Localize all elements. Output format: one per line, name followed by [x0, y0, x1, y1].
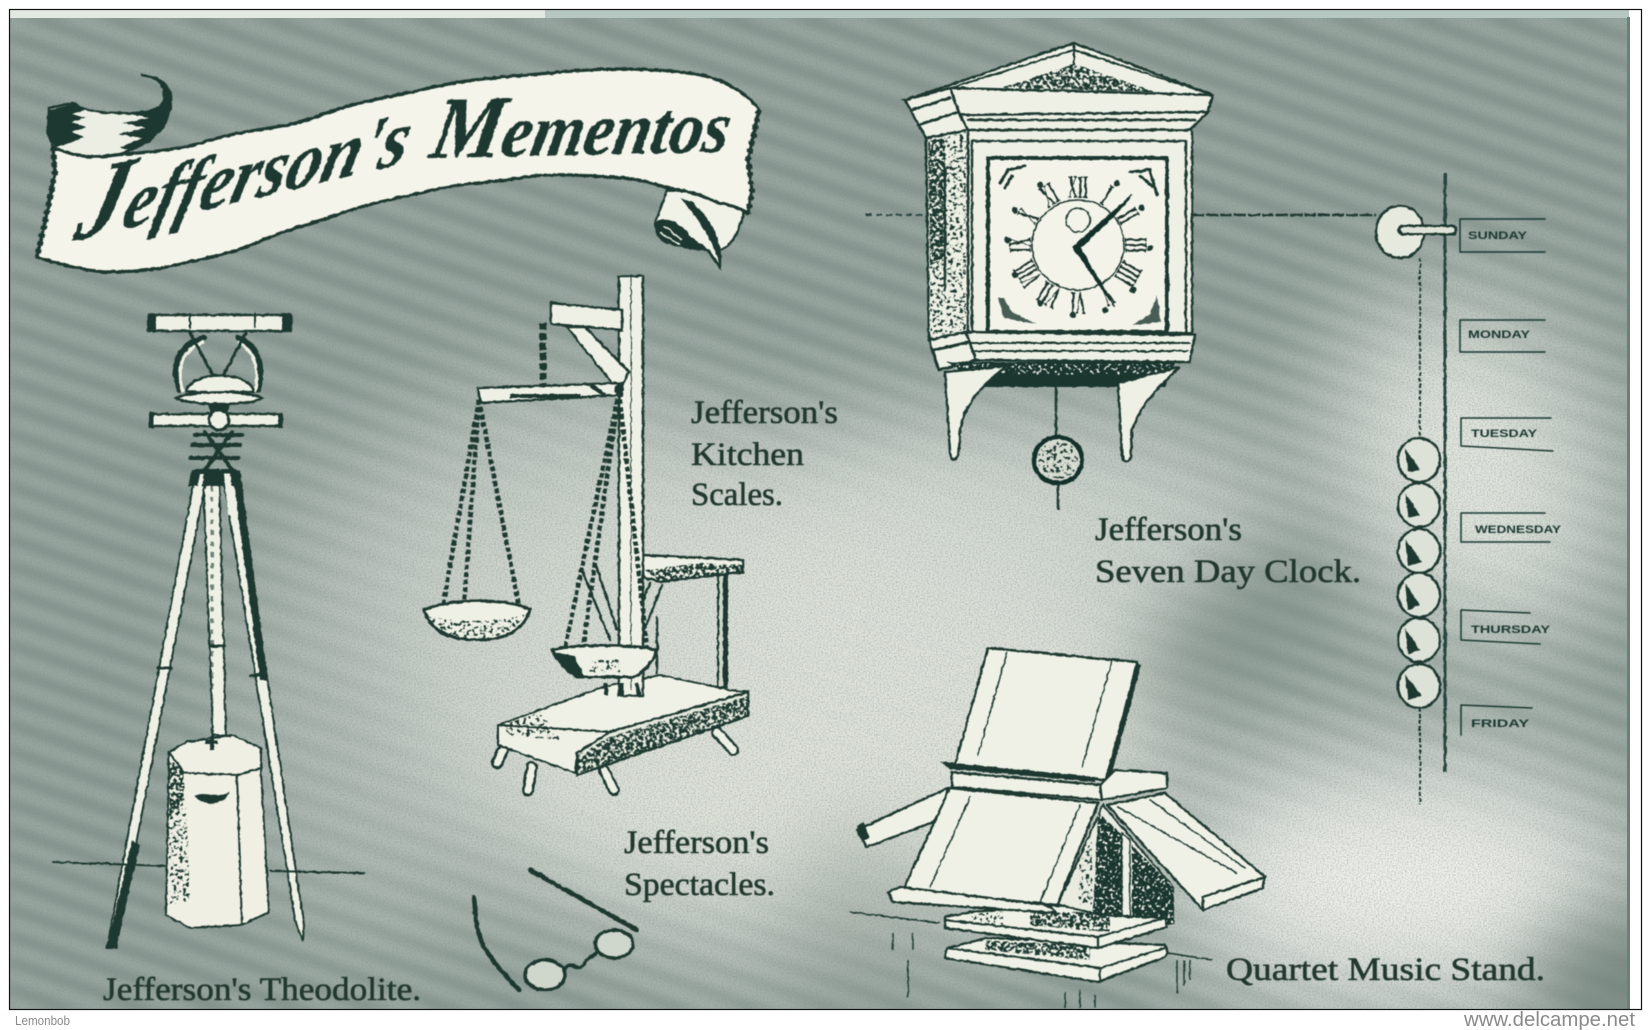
scale post and arm: [551, 276, 643, 697]
caption: clock: Seven Day Clock.: [1095, 554, 1361, 590]
roman numerals: IX: [1004, 237, 1039, 253]
base top: [498, 675, 748, 732]
lower base plate: [945, 938, 1168, 982]
base front: [498, 725, 610, 773]
Sunday: [1460, 219, 1545, 252]
right lens: [595, 930, 633, 958]
roman numerals: I: [1095, 179, 1118, 212]
left bracket: [945, 366, 1006, 460]
Monday: [1460, 320, 1545, 352]
watermark: seller name: Lemonbob: [15, 1013, 70, 1028]
bridge: [565, 952, 597, 968]
kitchen scales: [424, 276, 748, 790]
banner right tail hatching: [655, 198, 721, 267]
right bracket: [1118, 367, 1180, 462]
upper music panel: [940, 648, 1141, 782]
caption: music stand: Quartet Music Stand.: [1226, 952, 1545, 988]
banner ribbon: [37, 69, 759, 272]
shelf struts: [632, 583, 662, 673]
lower moulding: [929, 332, 1195, 370]
minute dots: [1004, 180, 1153, 318]
Sunday: SUNDAY: [1468, 230, 1528, 242]
quartet music stand: [850, 648, 1265, 1008]
Monday: MONDAY: [1468, 329, 1531, 341]
roman numerals: VIII: [1007, 255, 1050, 292]
lower front music panel: [888, 788, 1098, 913]
caption: clock: [1095, 512, 1361, 590]
spectacles: [474, 870, 637, 990]
banner serrated edges: [37, 110, 759, 257]
roman numerals: II: [1109, 203, 1145, 230]
right pan with chains: [552, 392, 657, 677]
scale base and shelf: [497, 555, 748, 790]
pulley: [1376, 206, 1424, 258]
caption: kitchen scales: Jefferson's: [691, 395, 838, 431]
telescope: [147, 313, 291, 331]
hanging rope: [1419, 258, 1421, 805]
clock side: [926, 130, 968, 340]
legs: [497, 732, 733, 790]
corner ornaments: [998, 166, 1161, 325]
left pan with chains: [424, 400, 530, 640]
title word: Jefferson's: Jefferson's: [65, 67, 428, 266]
Tuesday: [1461, 418, 1553, 451]
tripod head: [188, 432, 242, 515]
caption: kitchen scales: Scales.: [691, 477, 783, 513]
vertical circle frame: [176, 333, 262, 420]
caption: kitchen scales: [691, 395, 838, 513]
Friday: [1461, 705, 1532, 735]
numeral ring: [1032, 200, 1124, 290]
temple arms: [474, 870, 637, 990]
seconds circle: [1066, 208, 1090, 232]
rope from clock to pulley: [1192, 214, 1376, 216]
tripod legs: [107, 470, 304, 948]
title: [65, 67, 741, 266]
instrument case: [166, 735, 269, 928]
caption: spectacles: Spectacles.: [624, 867, 775, 903]
roman numerals: XII: [1068, 171, 1088, 206]
Tuesday: TUESDAY: [1471, 428, 1538, 440]
top light strip of the scan: [10, 10, 545, 18]
caption: clock: Jefferson's: [1095, 512, 1242, 548]
dark underside: [947, 362, 1176, 387]
dial: [988, 158, 1167, 332]
shelf support: [718, 575, 727, 687]
Wednesday: [1461, 513, 1562, 542]
weights: [1398, 438, 1440, 708]
caption: kitchen scales: Kitchen: [691, 437, 804, 473]
wall line: [1444, 173, 1446, 772]
caption: spectacles: Jefferson's: [624, 825, 769, 861]
cross level: [149, 410, 283, 430]
Thursday: [1461, 610, 1551, 644]
banner right tail: [655, 190, 748, 267]
roman numerals: XI: [1034, 177, 1065, 215]
roman numerals: VII: [1032, 274, 1067, 315]
Wednesday: WEDNESDAY: [1475, 524, 1562, 536]
pendulum: [1034, 380, 1082, 510]
weight rope and pulley: [1192, 173, 1452, 805]
roman numerals: V: [1093, 276, 1119, 312]
pediment: [905, 43, 1213, 115]
scan right edge shadow: [1627, 17, 1630, 1010]
title word: Mementos: Mementos: [422, 74, 741, 178]
base side: [577, 692, 748, 775]
roman numerals: IIII: [1107, 255, 1148, 291]
hook: [1403, 224, 1452, 236]
Friday: FRIDAY: [1471, 718, 1530, 730]
left lens: [525, 960, 565, 990]
middle block: [952, 770, 1167, 800]
horizon lines: [53, 862, 364, 873]
shelf: [643, 555, 743, 582]
Thursday: THURSDAY: [1471, 624, 1551, 636]
cornice: [905, 88, 1208, 138]
banner left tail hatching: [48, 80, 170, 150]
seven day clock: [866, 43, 1213, 510]
theodolite: [53, 313, 364, 948]
roman numerals: III: [1117, 237, 1152, 253]
banner: [37, 67, 759, 272]
clock hands: [1073, 195, 1132, 306]
rope left of clock: [866, 214, 926, 216]
caption: spectacles: [624, 825, 775, 903]
left wing: [857, 788, 948, 847]
banner left tail: [48, 75, 171, 157]
roman numerals: VI: [1070, 284, 1086, 319]
right wing: [1107, 793, 1265, 910]
caption: theodolite: Jefferson's Theodolite.: [103, 972, 421, 1008]
day labels: [1460, 219, 1562, 735]
beam and hanger: [478, 323, 624, 403]
upper base plate: [945, 905, 1167, 948]
clock front: [968, 130, 1192, 333]
floor lines: [850, 912, 1212, 1008]
roman numerals: X: [1011, 204, 1047, 230]
roman numerals: [1004, 171, 1152, 319]
interior: [1057, 805, 1173, 937]
